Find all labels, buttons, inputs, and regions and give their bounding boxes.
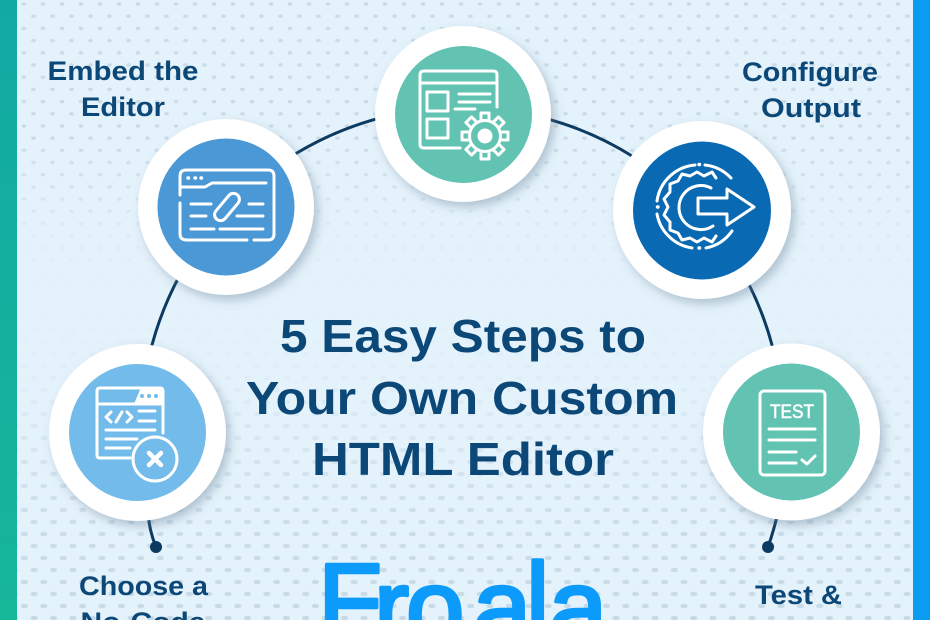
label: embed the editor: Editor	[81, 92, 166, 122]
step: choose a no-code editor	[49, 344, 226, 521]
icon: gear with arrow	[657, 164, 754, 248]
step: test and publish	[703, 344, 880, 520]
icon: window with gear	[420, 71, 508, 159]
title: 5 Easy Steps to	[280, 310, 646, 362]
label: choose a no-code editor: Choose a	[79, 571, 209, 601]
icon: test document	[760, 391, 825, 475]
label: configure output	[742, 57, 878, 123]
label: test and publish: Test &	[755, 580, 842, 610]
step: configure output	[613, 121, 791, 299]
label: test and publish	[750, 580, 846, 620]
connecting arc	[148, 107, 778, 553]
icon: code window with x	[97, 388, 177, 481]
label: configure output: Output	[761, 93, 861, 123]
icon: browser with pencil	[180, 170, 274, 240]
label: embed the editor: Embed the	[48, 56, 198, 86]
title	[246, 310, 678, 485]
step: center settings	[375, 26, 551, 202]
label: configure output: Configure	[742, 57, 878, 87]
title: HTML Editor	[312, 433, 614, 485]
title: Your Own Custom	[246, 372, 678, 424]
label: choose a no-code editor	[79, 571, 209, 620]
left side bar	[0, 0, 17, 620]
step: embed the editor	[138, 119, 314, 295]
right side bar	[913, 0, 930, 620]
step: test and publish: TEST	[770, 402, 814, 423]
label: embed the editor	[48, 56, 198, 122]
